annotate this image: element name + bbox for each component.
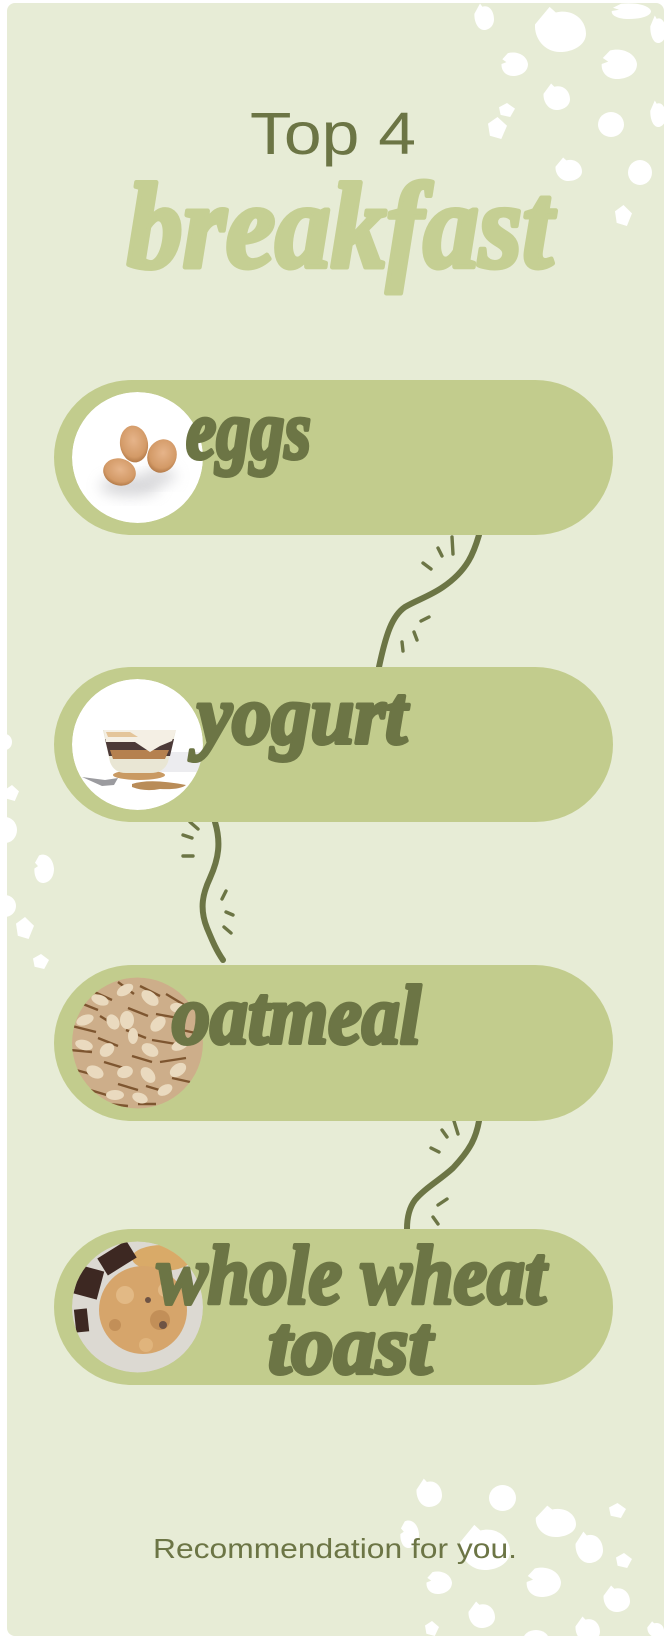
connector: eggs to yogurt <box>379 535 479 667</box>
label: toast: toast <box>268 1299 435 1392</box>
icon: yogurt photo <box>72 679 210 810</box>
footer text: Recommendation for you. <box>153 1533 517 1564</box>
connector: oatmeal to toast <box>407 1121 479 1229</box>
panel: whole wheat toast <box>54 1229 613 1392</box>
label: oatmeal: oatmeal <box>172 969 422 1062</box>
title: Top 4: Top 4 <box>250 101 416 167</box>
panel: yogurt <box>54 667 613 822</box>
panel: oatmeal <box>54 965 613 1121</box>
panel: eggs <box>54 380 613 535</box>
white confetti: left edge <box>0 734 54 969</box>
connector: yogurt to oatmeal <box>183 822 233 960</box>
label: eggs: eggs <box>186 384 311 477</box>
label: yogurt: yogurt <box>189 669 409 762</box>
white confetti: top right <box>474 3 664 226</box>
icon: eggs photo <box>72 392 203 523</box>
icon: oatmeal photo <box>70 978 203 1108</box>
label: whole wheat: whole wheat <box>157 1229 548 1322</box>
title: breakfast: breakfast <box>127 159 556 294</box>
icon: toast photo <box>72 1241 203 1372</box>
white confetti: bottom right <box>400 1479 664 1636</box>
